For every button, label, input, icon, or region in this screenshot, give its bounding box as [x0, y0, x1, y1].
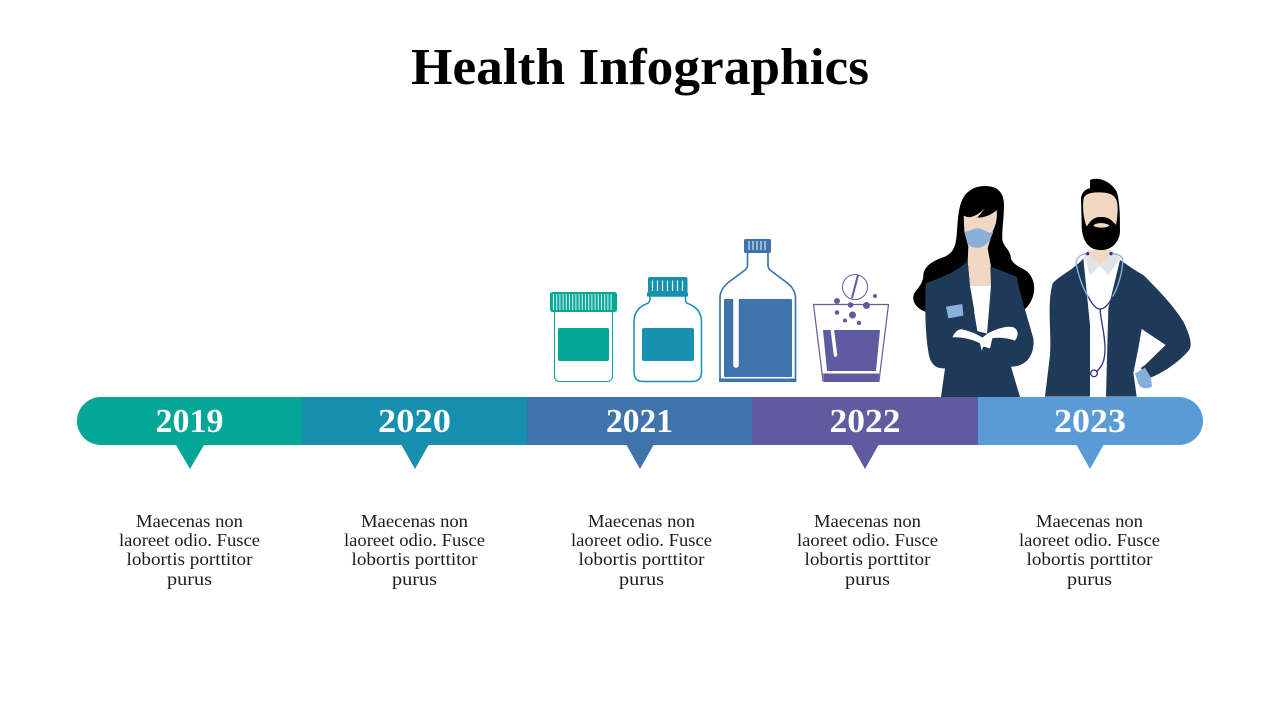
- segment: 2019: [77, 397, 302, 469]
- illustration: male doctor with stethoscope: [1045, 179, 1191, 397]
- text block: 2020: purus: [392, 569, 437, 589]
- text block: 2021: Maecenas non: [588, 511, 695, 531]
- text block: 2023: laoreet odio. Fusce: [1019, 530, 1160, 550]
- segment: 2023: [978, 397, 1203, 469]
- segment: 2019: 2019: [156, 403, 224, 440]
- title: Health Infographics: [411, 39, 869, 96]
- text block: 2023: Maecenas non: [1036, 511, 1143, 531]
- timeline bar: [77, 397, 1203, 469]
- icon: glass with dissolving tablet: [814, 274, 888, 382]
- text block: 2022: lobortis porttitor: [804, 549, 930, 569]
- text block: 2023: purus: [1067, 569, 1112, 589]
- text block: 2020: lobortis porttitor: [352, 549, 478, 569]
- text block: 2023: [1019, 511, 1160, 589]
- text block: 2022: purus: [845, 569, 890, 589]
- text block: 2021: [571, 511, 712, 589]
- segment: 2022: [752, 397, 978, 469]
- text block: 2022: Maecenas non: [814, 511, 921, 531]
- segment: 2021: 2021: [606, 403, 673, 440]
- segment: 2022: 2022: [830, 403, 900, 440]
- text block: 2019: lobortis porttitor: [126, 549, 252, 569]
- segment: 2023: 2023: [1054, 403, 1126, 440]
- segment: 2020: 2020: [378, 403, 451, 440]
- text block: 2022: laoreet odio. Fusce: [797, 530, 938, 550]
- text block: 2020: Maecenas non: [361, 511, 468, 531]
- icon: green jar: [550, 292, 617, 382]
- text block: 2019: purus: [167, 569, 212, 589]
- text block: 2019: Maecenas non: [136, 511, 243, 531]
- illustration: female doctor with mask: [913, 186, 1034, 397]
- text block: 2022: [797, 511, 938, 589]
- segment: 2021: [527, 397, 752, 469]
- text block: 2023: lobortis porttitor: [1026, 549, 1152, 569]
- text block: 2020: laoreet odio. Fusce: [344, 530, 485, 550]
- segment: 2020: [302, 397, 528, 469]
- text block: 2019: [119, 511, 260, 589]
- icon: blue bottle: [719, 239, 796, 382]
- text block: 2021: purus: [619, 569, 664, 589]
- icon: teal bottle: [634, 277, 702, 382]
- text block: 2019: laoreet odio. Fusce: [119, 530, 260, 550]
- text block: 2021: lobortis porttitor: [578, 549, 704, 569]
- text block: 2020: [344, 511, 485, 589]
- text block: 2021: laoreet odio. Fusce: [571, 530, 712, 550]
